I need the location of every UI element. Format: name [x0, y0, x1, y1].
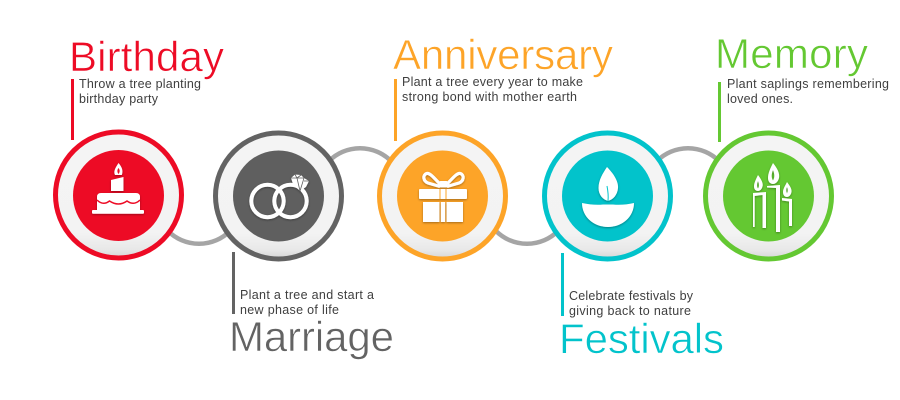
text block: giving back to nature: [569, 304, 691, 318]
text block: new phase of life: [240, 303, 339, 317]
panel: memory: [706, 30, 889, 259]
text block: Celebrate festivals by: [569, 289, 694, 303]
badge circle: [380, 133, 506, 259]
accent bar: [394, 79, 397, 141]
panel: anniversary: [380, 31, 613, 259]
badge circle: [216, 133, 342, 259]
heading: Birthday: Birthday: [69, 33, 224, 80]
text block: strong bond with mother earth: [402, 90, 577, 104]
icon: birthday cake: [92, 163, 144, 214]
heading: Festivals: Festivals: [559, 315, 724, 362]
badge circle: [56, 132, 182, 258]
panel: birthday: [56, 33, 224, 258]
text block: Plant a tree every year to make: [402, 75, 583, 89]
text block: Plant a tree and start a: [240, 288, 374, 302]
panel: festivals: [544, 133, 724, 362]
icon: gift box: [419, 173, 467, 222]
text block: loved ones.: [727, 92, 793, 106]
icon: oil lamp: [582, 167, 634, 227]
accent bar: [561, 253, 564, 316]
accent bar: [232, 252, 235, 314]
icon: wedding rings: [251, 174, 309, 217]
badge circle: [706, 133, 832, 259]
heading: Marriage: Marriage: [229, 313, 394, 360]
text block: birthday party: [79, 92, 159, 106]
accent bar: [718, 82, 721, 142]
heading: Anniversary: Anniversary: [393, 31, 613, 78]
connector arcs: [168, 148, 719, 244]
panel: marriage: [216, 133, 394, 360]
icon: candles: [753, 163, 792, 232]
text block: Plant saplings remembering: [727, 77, 889, 91]
accent bar: [71, 79, 74, 140]
heading: Memory: Memory: [715, 30, 868, 77]
text block: Throw a tree planting: [79, 77, 201, 91]
badge circle: [544, 133, 670, 259]
